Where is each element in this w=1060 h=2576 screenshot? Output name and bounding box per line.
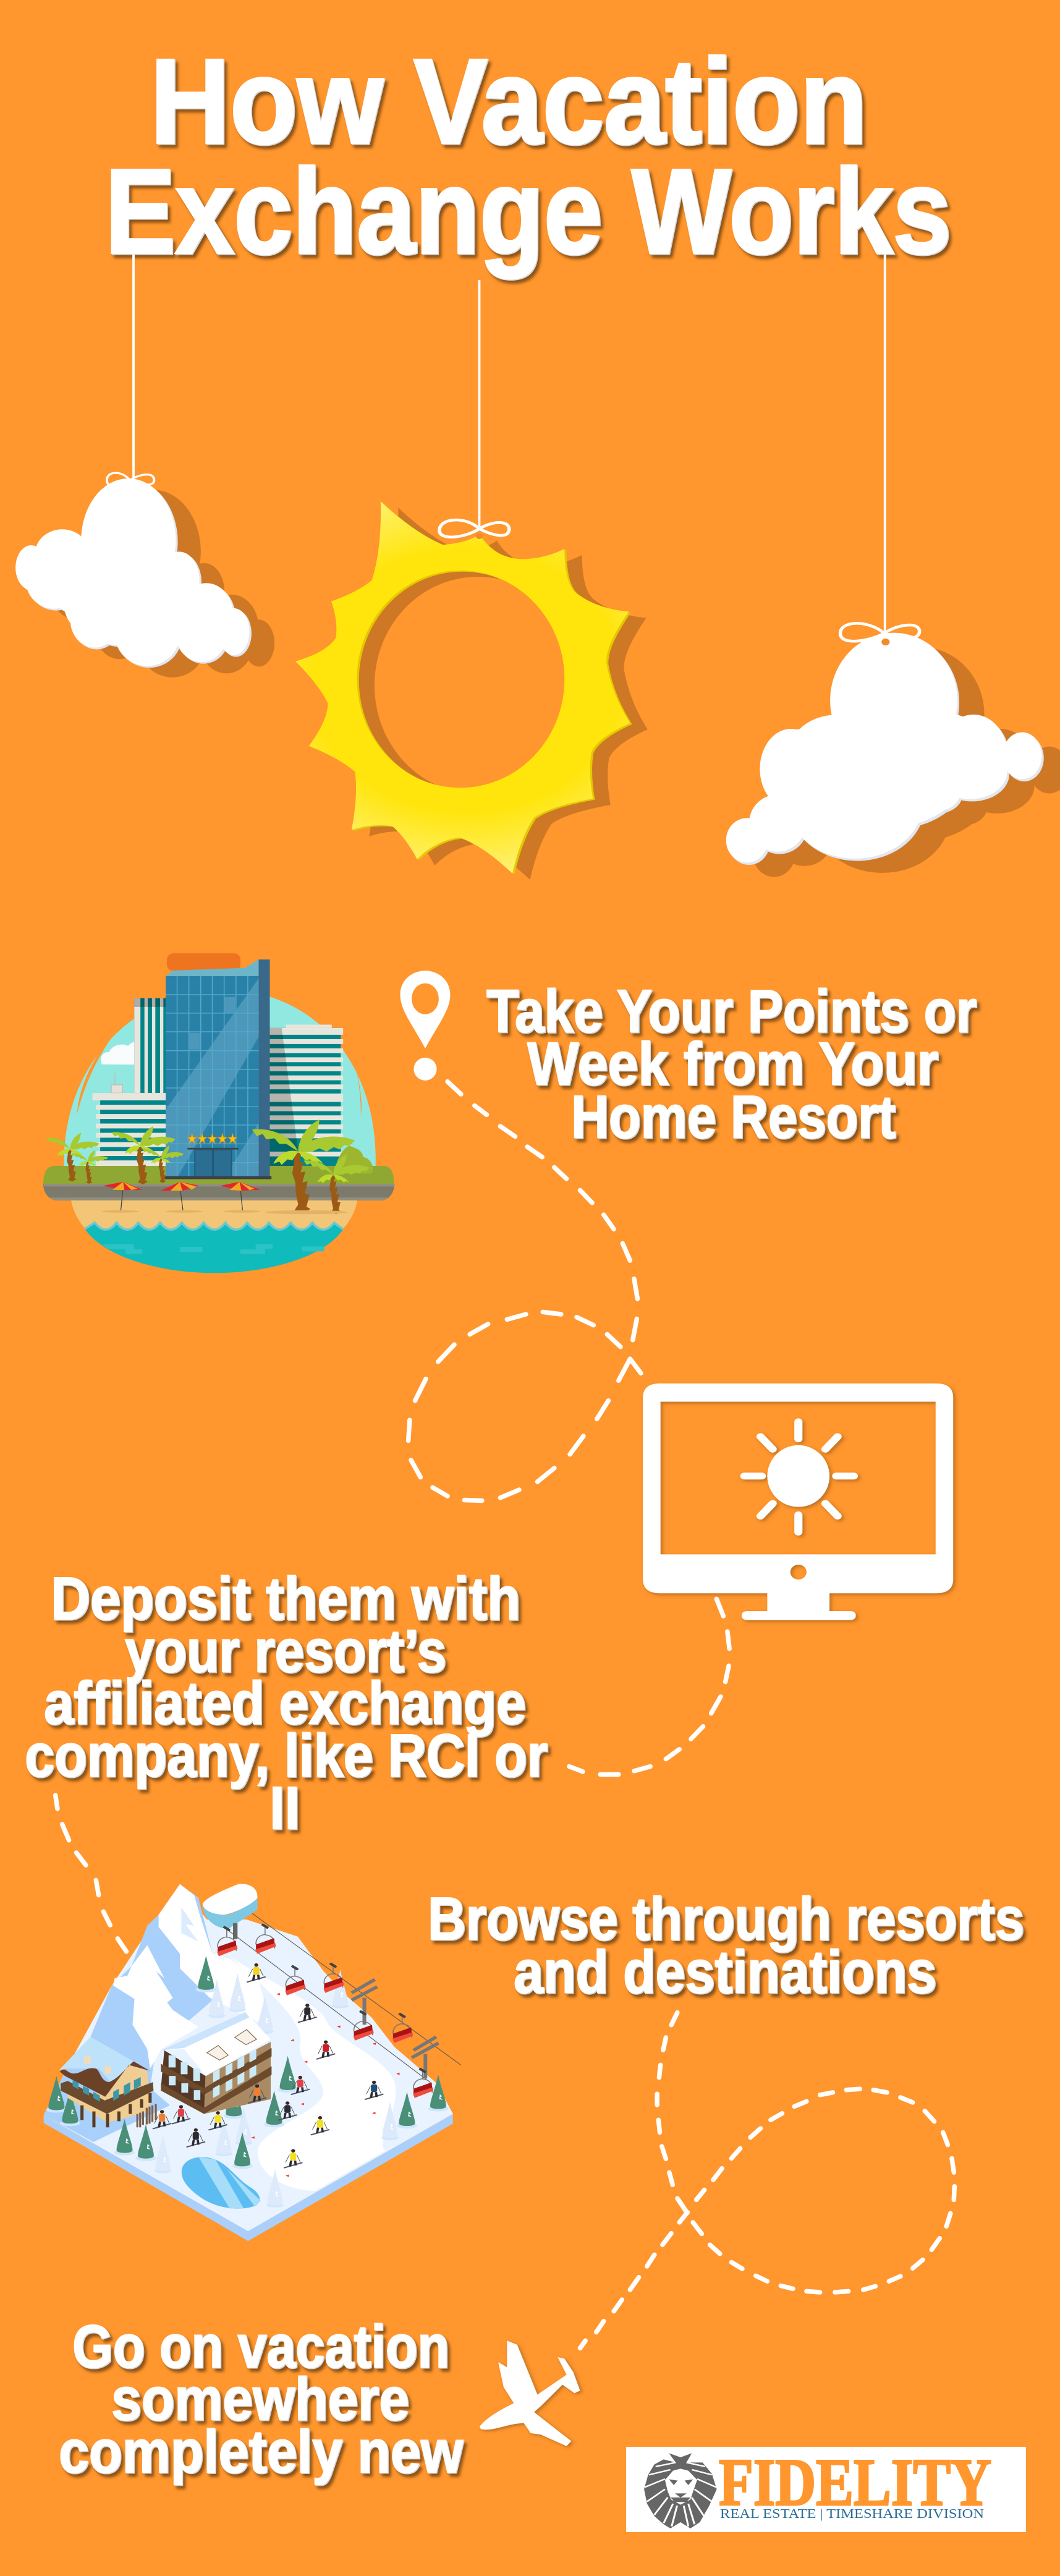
icon: right cloud bbox=[726, 623, 1060, 877]
title: How Vacation bbox=[150, 34, 867, 169]
dashed route: monitor to step 2 text bbox=[569, 1599, 729, 1774]
step 2 text: II bbox=[269, 1774, 300, 1842]
main tower: ★★★★★ bbox=[187, 1132, 237, 1146]
title bbox=[105, 34, 951, 279]
icon: map pin bbox=[401, 971, 450, 1081]
step 3 text: and destinations bbox=[514, 1938, 936, 2005]
icon: left cloud bbox=[15, 473, 274, 678]
icon: lion head bbox=[644, 2453, 717, 2528]
step 1 text: Week from Your bbox=[527, 1030, 938, 1097]
brand name: FIDELITY bbox=[719, 2445, 991, 2520]
step 2 text: affiliated exchange bbox=[44, 1669, 526, 1736]
icon: airplane bbox=[480, 2340, 580, 2446]
orange roof block bbox=[167, 953, 240, 971]
step 1 text bbox=[486, 977, 977, 1150]
step 4 text: somewhere bbox=[111, 2365, 409, 2433]
slalom flags bbox=[251, 1993, 400, 2177]
small chalet bbox=[59, 2037, 153, 2127]
cloud bbox=[101, 1042, 149, 1065]
skiers bbox=[153, 1963, 383, 2168]
title: Exchange Works bbox=[105, 144, 951, 279]
ski run bbox=[229, 1956, 396, 2191]
icon: sun bbox=[295, 501, 648, 880]
trees bbox=[46, 1956, 448, 2208]
base slab bbox=[44, 2114, 453, 2241]
dashed route: pin to monitor bbox=[409, 1082, 641, 1500]
snow surface bbox=[44, 1884, 453, 2231]
step 2 text bbox=[25, 1565, 548, 1842]
tagline: REAL ESTATE | TIMESHARE DIVISION bbox=[720, 2506, 984, 2521]
step 1 text: Take Your Points or bbox=[486, 977, 977, 1045]
rear tower bbox=[134, 998, 166, 1093]
step 2 text: Deposit them with bbox=[51, 1565, 520, 1632]
mountain snow faces bbox=[113, 1884, 346, 2068]
step 4 text bbox=[59, 2313, 463, 2485]
main lodge bbox=[161, 2012, 271, 2114]
logo: Fidelity Real Estate bbox=[626, 2445, 1026, 2532]
illustration: ski resort bbox=[44, 1884, 461, 2241]
mountain shaded face bbox=[44, 1884, 213, 2142]
icon: computer monitor with sun bbox=[643, 1384, 953, 1620]
right building bbox=[270, 1024, 343, 1169]
sea bbox=[85, 1223, 343, 1273]
sky disc bbox=[64, 989, 376, 1167]
ski rack bbox=[137, 2104, 156, 2127]
step 3 text bbox=[428, 1885, 1024, 2005]
beach bbox=[71, 1201, 357, 1231]
illustration: beach hotel bbox=[43, 953, 394, 1273]
left building bbox=[93, 1093, 166, 1169]
logo panel bbox=[626, 2447, 1026, 2532]
step 2 text: your resort’s bbox=[125, 1617, 446, 1685]
step 4 text: Go on vacation bbox=[72, 2313, 449, 2380]
ice pond bbox=[182, 2157, 261, 2209]
ground and road bbox=[43, 1166, 394, 1201]
beach umbrellas bbox=[102, 1182, 348, 1214]
main tower bbox=[164, 959, 271, 1179]
bush bbox=[336, 1146, 373, 1174]
palm trees bbox=[46, 1120, 370, 1214]
dashed route: step 2 text to ski resort bbox=[56, 1795, 127, 1952]
antenna box bbox=[111, 1073, 122, 1093]
dashed route: step 3 text to airplane bbox=[580, 2013, 954, 2348]
hanging decorations bbox=[15, 254, 1060, 880]
strings bbox=[134, 254, 885, 632]
step 1 text: Home Resort bbox=[571, 1083, 896, 1150]
step 2 text: company, like RCI or bbox=[25, 1722, 548, 1789]
step 4 text: completely new bbox=[59, 2418, 463, 2485]
lift cables and pylons bbox=[203, 1884, 461, 2098]
